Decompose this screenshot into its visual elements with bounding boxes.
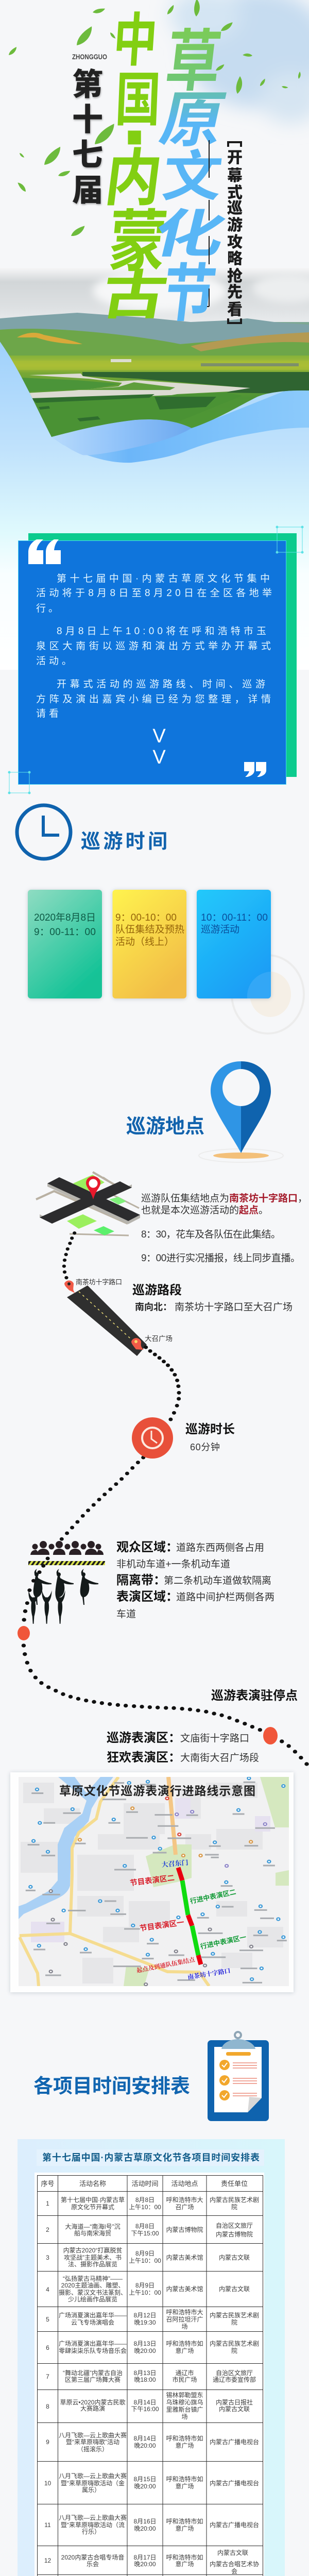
section: parade time	[17, 805, 304, 1033]
table title: 第十七届中国·内蒙古草原文化节各项目时间安排表	[42, 2152, 260, 2163]
title: 中国·内蒙古	[97, 9, 172, 325]
activity names: 暨“来草原嗨歌”活动	[66, 2438, 119, 2446]
title: 中国·内蒙古: 中	[111, 9, 159, 73]
responsible units	[210, 2196, 259, 2576]
route dots 3	[27, 1558, 48, 1603]
activity names: 内蒙古2020“打赢脱贫	[63, 2246, 122, 2254]
subtitle: 开幕式巡游攻略抢先看: 游	[227, 216, 243, 234]
subtitle: 开幕式巡游攻略抢先看: 看	[227, 301, 243, 318]
route line	[178, 1868, 201, 1964]
title: 中国·内蒙古: 国	[114, 67, 162, 133]
activity venues: 意广场	[175, 2442, 194, 2449]
blue card	[19, 541, 286, 784]
activity venues: 内蒙古美术馆	[166, 2253, 203, 2261]
row numbers: 4	[46, 2286, 49, 2293]
title: 草原文化节: 化	[148, 206, 232, 263]
subtitle: 开幕式巡游攻略抢先看: 开	[227, 149, 243, 166]
route dots 1	[64, 1233, 75, 1278]
intro text: 活动将于8月8日至8月20日在全区各地举	[36, 587, 272, 599]
text: audience zones: 隔离带：	[116, 1573, 166, 1587]
title: 中国·内蒙古: 蒙	[105, 205, 170, 279]
activity times: 下午15:00	[131, 2230, 159, 2237]
sky wash	[170, 0, 309, 124]
table header: 责任单位	[221, 2180, 248, 2188]
text: audience zones: 表演区域：	[116, 1590, 178, 1604]
panel: schedule table	[18, 2139, 285, 2576]
text: duration: 巡游时长	[185, 1422, 235, 1436]
activity venues: 呼和浩特市大	[166, 2196, 203, 2204]
table title band	[37, 2149, 264, 2166]
text: audience zones	[116, 1540, 274, 1620]
activity venues: 呼和浩特市如	[166, 2553, 203, 2561]
row numbers: 10	[44, 2480, 51, 2487]
activity names: 第十七届中国·内蒙古草	[61, 2196, 125, 2204]
illustration: road segment	[64, 1280, 147, 1356]
activity names: 广场消夏演出嘉年华——	[59, 2311, 127, 2319]
text: parade stops: 狂欢表演区：	[107, 1751, 181, 1765]
row numbers: 7	[46, 2373, 49, 2380]
activity names: 大海道—“南海I号”沉	[65, 2223, 121, 2230]
map markers lower	[26, 1882, 287, 1985]
row numbers: 9	[46, 2438, 49, 2446]
subtitle: 开幕式巡游攻略抢先看: 攻	[227, 234, 243, 251]
activity venues: 内蒙古博物院	[166, 2226, 203, 2233]
activity times: 8月12日	[133, 2312, 157, 2319]
activity names: （摇滚乐）	[77, 2445, 108, 2453]
parks	[124, 1777, 289, 1986]
responsible units: 内蒙古日报社	[216, 2398, 253, 2406]
responsible units: 自治区文旅厅	[216, 2222, 253, 2229]
activity times: 晚18:00	[134, 2376, 156, 2383]
activity times: 8月14日	[133, 2435, 157, 2442]
illustration: crossroads	[36, 1172, 140, 1235]
subtitle: 开幕式巡游攻略抢先看: 先	[227, 284, 243, 301]
activity times: 8月16日	[133, 2518, 157, 2525]
intro text: 第十七届中国·内蒙古草原文化节集中	[57, 573, 270, 584]
panel: route map	[10, 1772, 294, 1992]
activity times: 8月14日	[133, 2399, 157, 2406]
activity times: 8月9日	[135, 2282, 154, 2289]
activity venues: 呼和浩特市如	[166, 2434, 203, 2442]
responsible units: 通辽市委宣传部	[213, 2376, 256, 2383]
title: 草原文化节: 节	[159, 259, 220, 329]
down chevrons: V	[152, 747, 166, 768]
responsible units: 内蒙古博物院	[216, 2230, 253, 2238]
text: audience zones: 道路中间护栏两侧各两	[176, 1591, 274, 1603]
activity times: 晚20:00	[134, 2442, 156, 2449]
activity times: 下午16:00	[131, 2405, 159, 2413]
title: 草原文化节: 草	[162, 25, 225, 99]
activity names: 区第三届广场舞大赛	[65, 2376, 121, 2383]
card: warm-up: 队伍集结及预热	[115, 924, 184, 935]
activity times: 晚20:00	[134, 2525, 156, 2532]
tape barrier	[28, 1561, 105, 1565]
text: assembly point: 也就是本次巡游活动的起点。	[141, 1205, 268, 1216]
title: 第十七届: 届	[72, 173, 103, 208]
icon: clipboard	[208, 2032, 269, 2121]
table grid	[37, 2175, 263, 2576]
row numbers: 3	[46, 2254, 49, 2261]
title: 第十七届: 第	[72, 67, 103, 102]
heading: 巡游地点	[126, 1116, 204, 1138]
activity times: 晚20:00	[134, 2483, 156, 2490]
activity names: 摄影、蒙汉文书法篆刻、	[59, 2289, 127, 2296]
row numbers: 5	[46, 2316, 49, 2323]
table sheet	[35, 2173, 264, 2576]
activity names: 八月飞歌—云上歌曲大赛	[59, 2431, 127, 2439]
responsible units: 内蒙古广播电视台	[210, 2521, 259, 2529]
activity names: 八月飞歌—云上歌曲大赛	[59, 2514, 127, 2521]
intro text	[36, 573, 272, 719]
title: 草原文化节	[148, 25, 232, 329]
intro text: 请看	[36, 708, 62, 719]
responsible units: 院	[231, 2347, 237, 2354]
activity names: 2020内蒙古合唱专场音	[61, 2553, 124, 2561]
responsible units: 内蒙古广播电视台	[210, 2438, 259, 2446]
activity venues: 乌珠穆沁旗乌	[166, 2398, 203, 2406]
activity venues: 召阿拉坦汗广	[166, 2315, 203, 2323]
table header: 活动名称	[79, 2180, 106, 2188]
activity times: 上午10：00	[129, 2257, 161, 2264]
activity venues: 召广场	[175, 2204, 194, 2211]
map blocks	[21, 1783, 283, 1984]
activity venues: 意广场	[175, 2524, 194, 2532]
responsible units: 内蒙古文联	[219, 2285, 250, 2293]
text: assembly point	[141, 1192, 307, 1264]
activity names	[59, 2196, 127, 2576]
main avenue	[168, 1777, 176, 1855]
card: parade	[197, 890, 271, 998]
card: date	[28, 890, 102, 998]
faint clock decoration	[232, 955, 304, 1033]
leaves	[7, 0, 302, 237]
activity venues: 市民广场	[172, 2376, 197, 2383]
row numbers: 2	[46, 2226, 49, 2233]
intro text: 行。	[36, 603, 61, 614]
activity venues	[166, 2196, 203, 2576]
title: 草原文化节: 文	[159, 146, 226, 207]
intro text: 泉区大南街以巡游和演出方式举办开幕式	[36, 640, 271, 652]
map title: 草原文化节巡游表演行进路线示意图	[59, 1784, 255, 1798]
activity venues: 内蒙古美术馆	[166, 2285, 203, 2293]
table header: 活动地点	[171, 2180, 198, 2188]
activity names: “舞动北疆”内蒙古自治	[63, 2369, 123, 2377]
pale lower background strip	[0, 670, 18, 804]
activity names: “弘扬蒙古马精神”——	[63, 2275, 123, 2282]
activity venues: 里雅斯台镇广	[166, 2405, 203, 2413]
illustration: audience and dancers	[28, 1541, 105, 1624]
intro text: 开幕式活动的巡游路线、时间、巡游	[57, 679, 265, 690]
card: date: 2020年8月8日	[34, 912, 96, 923]
corner bracket top right	[276, 526, 303, 553]
green backing	[28, 533, 297, 777]
pinyin label: ZHONGGUO	[72, 53, 107, 61]
activity times: 8月13日	[133, 2340, 157, 2347]
text: audience zones: 非机动车道+一条机动车道	[116, 1558, 230, 1570]
road label start: 南茶坊十字路口	[76, 1278, 122, 1286]
row numbers: 1	[46, 2200, 49, 2207]
text: parade stops: 文庙街十字路口	[180, 1733, 249, 1744]
activity times: 晚19:30	[134, 2319, 156, 2326]
responsible units: 内蒙古文联	[217, 2549, 248, 2556]
audience	[30, 1541, 104, 1555]
activity names: 2020主题油画、雕塑、	[61, 2281, 124, 2289]
activity venues: 意广场	[175, 2560, 194, 2568]
road label end: 大召广场	[145, 1335, 173, 1343]
card: parade: 巡游活动	[201, 924, 239, 935]
text: parade stops: 大南街大召广场段	[180, 1752, 259, 1764]
icon: map pin	[199, 1061, 283, 1162]
text: duration	[185, 1422, 235, 1452]
title: 草原文化节: 原	[154, 87, 231, 154]
row numbers: 8	[46, 2403, 49, 2410]
section heading: schedule: 各项目时间安排表	[33, 2076, 190, 2097]
activity venues: 呼和浩特市如	[166, 2517, 203, 2525]
table header: 活动时间	[131, 2180, 159, 2188]
map labels: 南茶坊十字路口	[187, 1966, 231, 1981]
responsible units: 自治区文旅厅	[216, 2369, 253, 2377]
subtitle: 开幕式巡游攻略抢先看: 巡	[227, 200, 243, 217]
activity names: 属乐）	[82, 2486, 100, 2494]
heading: route segment: 巡游路段	[132, 1283, 182, 1297]
activity times: 8月17日	[133, 2554, 157, 2561]
down chevrons: V	[152, 725, 166, 747]
text: audience zones: 道路东西两侧各占用	[176, 1542, 264, 1553]
row numbers	[44, 2200, 51, 2576]
responsible units: 院	[231, 2204, 237, 2211]
table header: 序号	[41, 2180, 55, 2188]
map labels: 行进中表演区一	[200, 1933, 247, 1951]
section: parade location	[36, 1061, 307, 1356]
card: warm-up: 9：00-10：00	[115, 912, 177, 923]
hero header panel	[0, 0, 309, 670]
activity venues: 呼和浩特市如	[166, 2340, 203, 2347]
row numbers: 6	[46, 2344, 49, 2351]
subtitle: 开幕式巡游攻略抢先看: 略	[227, 250, 243, 267]
text: parade stops	[107, 1689, 298, 1765]
responsible units: 内蒙古文联	[219, 2253, 250, 2261]
responsible units: 会	[231, 2568, 237, 2575]
activity names: 广场消夏演出嘉年华——	[59, 2340, 127, 2347]
activity venues: 通辽市	[175, 2369, 194, 2377]
activity times: 8月8日	[135, 2223, 154, 2230]
title: 中国·内蒙古: ·	[122, 85, 152, 189]
activity venues: 意广场	[175, 2482, 194, 2490]
responsible units: 内蒙古民族艺术剧	[210, 2340, 259, 2347]
text: assembly point: 巡游队伍集结地点为南茶坊十字路口，	[141, 1192, 307, 1204]
map labels: 节目表演区一	[139, 1918, 185, 1933]
row numbers: 11	[44, 2521, 51, 2529]
activity names: 暨“来草原嗨歌活动（流	[61, 2521, 125, 2529]
activity venues: 锡林郭勒盟东	[166, 2391, 203, 2399]
activity times	[129, 2196, 161, 2576]
activity names: 乐会	[87, 2561, 99, 2568]
responsible units: 院	[231, 2319, 237, 2326]
activity names: 暨“来草原嗨歌活动（金	[61, 2479, 125, 2487]
card: warm-up	[112, 890, 186, 998]
title: 第十七届: 十	[72, 103, 103, 137]
vertical rule	[207, 140, 209, 307]
grassland photograph	[0, 268, 309, 443]
activity venues: 呼和浩特市大	[166, 2308, 203, 2316]
text: assembly point: 8：30，花车及各队伍在此集结。	[141, 1229, 281, 1240]
card: warm-up: 活动（线上）	[115, 936, 174, 947]
activity names: 攻坚战”主题美术、书	[64, 2254, 122, 2261]
stop marker right	[263, 1727, 278, 1744]
activity times: 8月8日	[135, 2196, 154, 2204]
closing quote	[244, 762, 266, 777]
route dots 4	[24, 1611, 306, 1764]
map labels	[129, 1857, 247, 1981]
activity names: 草原云•2020内蒙古民歌	[60, 2398, 125, 2406]
activity times: 上午10：00	[129, 2204, 161, 2211]
panel: introduction	[0, 526, 309, 804]
yellow roads	[20, 1777, 209, 1986]
icon: red clock	[132, 1417, 173, 1459]
activity times: 晚20:00	[134, 2347, 156, 2354]
activity times: 8月13日	[133, 2369, 157, 2377]
activity names: 少儿绘画作品展览	[68, 2295, 117, 2303]
route dots 2	[62, 1347, 179, 1539]
activity venues: 场	[181, 2413, 188, 2420]
subtitle: 开幕式巡游攻略抢先看: 式	[227, 184, 243, 201]
icon: clock	[17, 805, 71, 859]
subtitle: 开幕式巡游攻略抢先看	[227, 142, 243, 323]
subtitle: 开幕式巡游攻略抢先看: 抢	[227, 267, 243, 285]
text: duration: 60分钟	[190, 1442, 220, 1452]
card: date: 9：00-11：00	[34, 927, 96, 938]
title: 第十七届	[72, 67, 103, 208]
activity venues: 意广场	[175, 2347, 194, 2354]
corner bracket bottom left	[8, 771, 30, 794]
title: 中国·内蒙古: 古	[97, 266, 172, 325]
map labels: 起点及到通队伍集结点	[136, 1955, 196, 1975]
text: route direction: 南向北：	[135, 1302, 172, 1312]
dancers	[28, 1569, 98, 1624]
responsible units: 内蒙古合唱艺术协	[210, 2560, 259, 2568]
activity names: 原文化节开幕式	[71, 2203, 114, 2211]
text: assembly point: 9：00进行实况播报，线上同步直播。	[141, 1252, 300, 1264]
activity names: 零肆柒柒乐队专场音乐会	[59, 2347, 127, 2354]
heading: 巡游时间	[81, 831, 167, 853]
intro text: 8月8日上午10:00将在呼和浩特市玉	[57, 625, 266, 637]
responsible units: 内蒙古民族艺术剧	[210, 2311, 259, 2319]
subtitle: 开幕式巡游攻略抢先看: 幕	[227, 167, 243, 184]
map labels: 节目表演区二	[129, 1873, 175, 1888]
title: 第十七届: 七	[72, 138, 103, 172]
activity names: 船与南宋海贸	[74, 2229, 111, 2237]
responsible units: 内蒙古民族艺术剧	[210, 2196, 259, 2204]
title: 中国·内蒙古: 内	[101, 144, 166, 213]
activity venues: 呼和浩特市如	[166, 2475, 203, 2483]
responsible units: 内蒙古广播电视台	[210, 2479, 259, 2487]
activity names: 法、摄影作品展览	[68, 2260, 117, 2268]
text: parade stops: 巡游表演驻停点	[211, 1689, 298, 1703]
map markers upper	[28, 1778, 283, 1870]
activity times: 8月9日	[135, 2250, 154, 2257]
table header	[41, 2180, 248, 2188]
activity times: 上午10：00	[129, 2289, 161, 2296]
row numbers: 12	[44, 2557, 51, 2564]
text: audience zones: 车道	[116, 1608, 136, 1620]
opening quote	[28, 539, 61, 564]
activity names: 八月飞歌—云上歌曲大赛	[59, 2472, 127, 2480]
activity times: 晚20:00	[134, 2561, 156, 2568]
intro text: 方阵及演出嘉宾小编已经为您整理，详情	[36, 693, 271, 705]
card: parade: 10：00-11：00	[201, 912, 268, 923]
activity names: 云飞专场演唱会	[71, 2318, 114, 2326]
river	[19, 1777, 113, 1919]
map labels: 行进中表演区二	[190, 1888, 237, 1905]
lower wave ribbon	[52, 381, 309, 463]
wave fold	[52, 419, 192, 455]
stop marker left	[18, 1626, 30, 1640]
responsible units: 内蒙古文联	[219, 2405, 250, 2413]
activity names: 大赛路演	[80, 2404, 105, 2412]
text: audience zones: 第二条机动车道做软隔离	[164, 1575, 271, 1586]
activity venues: 场	[181, 2323, 188, 2330]
text: parade stops: 巡游表演区：	[107, 1731, 181, 1745]
down chevrons	[152, 725, 166, 768]
activity names: 行乐）	[82, 2528, 100, 2535]
map labels: 大召东门	[161, 1857, 188, 1869]
blue background gradient	[0, 330, 309, 670]
activity times: 8月15日	[133, 2476, 157, 2483]
intro text: 活动。	[36, 655, 75, 667]
text: audience zones: 观众区域：	[116, 1540, 178, 1554]
text: route direction: 南茶坊十字路口至大召广场	[175, 1301, 293, 1313]
